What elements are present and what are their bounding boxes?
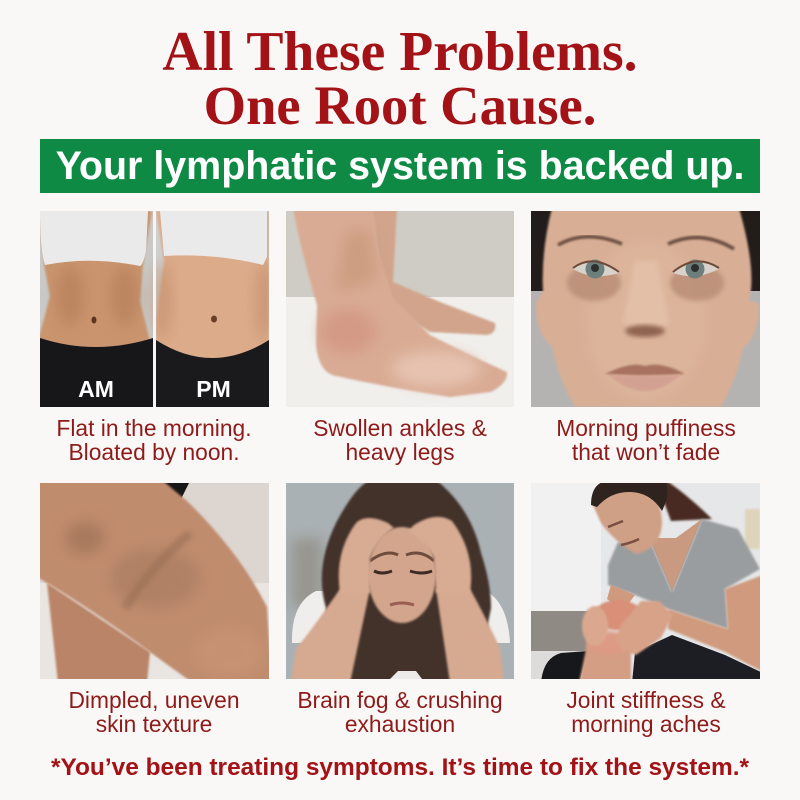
caption: brain fog: Brain fog & crushing (297, 687, 503, 713)
caption: joint stiffness (566, 687, 726, 737)
photo: joint pain (531, 483, 760, 679)
title: One Root Cause. (204, 75, 596, 136)
photo: dimpled skin (40, 483, 269, 679)
caption: bloating: Bloated by noon. (68, 439, 240, 465)
caption: puffiness (556, 415, 736, 465)
caption: puffiness: Morning puffiness (556, 415, 736, 441)
caption: skin texture (68, 687, 240, 737)
title: All These Problems. (162, 21, 638, 83)
photo: AM and PM stomach (40, 211, 269, 407)
photo: swollen ankles (286, 211, 514, 407)
caption: ankles (313, 415, 487, 465)
caption: puffiness: that won’t fade (572, 439, 720, 465)
photo: brain fog (286, 483, 514, 679)
photo: puffy face (531, 211, 760, 407)
caption: bloating (56, 415, 252, 465)
footer note: *You’ve been treating symptoms. It’s time to fix the system.* (51, 754, 749, 781)
caption: joint stiffness: Joint stiffness & (566, 687, 726, 713)
caption: joint stiffness: morning aches (571, 711, 721, 737)
caption: ankles: heavy legs (346, 439, 454, 465)
photo: AM and PM stomach: PM (196, 376, 231, 402)
green banner: Your lymphatic system is backed up. (56, 144, 744, 188)
photo: AM and PM stomach: AM (78, 376, 114, 402)
title (162, 21, 638, 136)
caption: brain fog (297, 687, 503, 737)
caption: brain fog: exhaustion (345, 711, 455, 737)
caption: skin texture: Dimpled, uneven (68, 687, 240, 713)
caption: ankles: Swollen ankles & (313, 415, 487, 441)
caption: bloating: Flat in the morning. (56, 415, 252, 441)
caption: skin texture: skin texture (96, 711, 212, 737)
